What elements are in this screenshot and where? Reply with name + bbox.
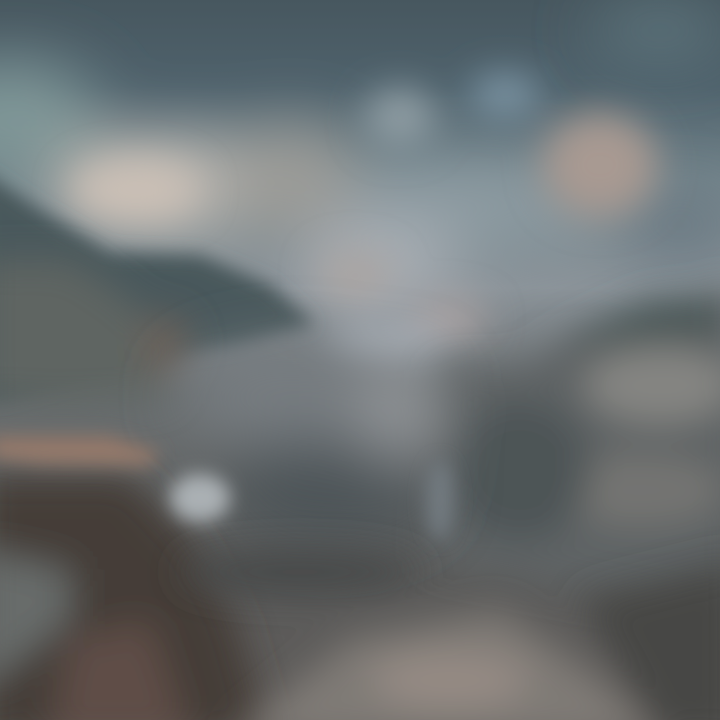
left shaded rock face: [0, 260, 190, 405]
sky glows and clouds: [0, 5, 720, 310]
pale pink sun and sky patches: [70, 73, 658, 364]
central valley: [180, 350, 440, 540]
right dark hills: [430, 285, 720, 620]
orange-brown ledge and white highlight: [0, 436, 454, 540]
foreground path and right shadow: [180, 550, 720, 720]
left dark mountain ridge: [0, 170, 315, 400]
foreground brown slope: [0, 475, 270, 720]
